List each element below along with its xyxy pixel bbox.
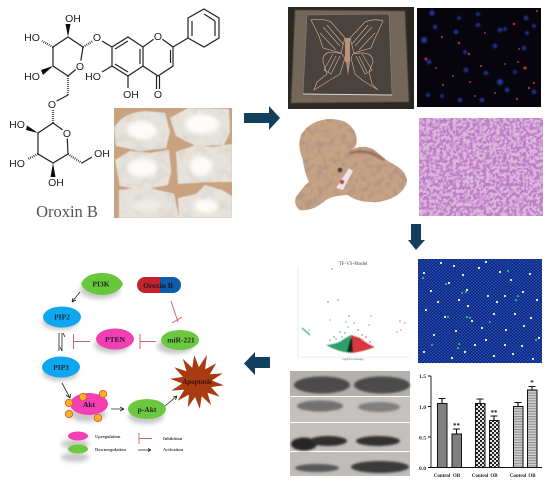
- legend: Activation: [163, 447, 183, 452]
- axis labels: OB: [490, 474, 498, 479]
- volcano plot title: TF-VS-Model: [339, 262, 368, 267]
- significance marks: [453, 379, 534, 430]
- node shadows: [42, 281, 193, 462]
- pathway diagram: [42, 273, 224, 462]
- node: Apoptosis burst: [170, 355, 224, 409]
- error bars: [438, 386, 536, 434]
- legend: Upregulation: [95, 434, 121, 439]
- gene microarray: [418, 259, 542, 363]
- legend: [68, 432, 183, 454]
- structure atom labels: O: [93, 32, 101, 44]
- node: PI3K: PI3K: [92, 280, 110, 288]
- axis labels: 0.5: [419, 436, 426, 442]
- chemical structure: Oroxin B: [9, 9, 219, 189]
- arrow: left: [244, 352, 270, 375]
- node: PTEN: [96, 328, 134, 350]
- structure atom labels: O: [154, 31, 162, 43]
- significance marks: **: [490, 409, 498, 417]
- axis labels: OB: [528, 474, 536, 479]
- western blot: [290, 371, 410, 476]
- compound name: Oroxin B: [36, 202, 98, 221]
- structure atom labels: HO: [9, 158, 25, 170]
- node: Akt: Akt: [83, 400, 96, 409]
- arrow: down: [408, 224, 425, 250]
- axes: [428, 376, 542, 468]
- structure atom labels: HO: [9, 119, 25, 131]
- volcano plot: [298, 262, 410, 361]
- node: PIP2: PIP2: [54, 312, 70, 322]
- structure atom labels: OH: [94, 148, 110, 160]
- bars: [438, 390, 537, 468]
- structure atom labels: O: [76, 61, 84, 73]
- axis labels: Control: [472, 474, 489, 479]
- axis labels: [419, 374, 536, 479]
- butterfly channels: [311, 19, 383, 90]
- axis labels: Control: [434, 474, 451, 479]
- structure atom labels: O: [63, 128, 71, 140]
- axis labels: Control: [510, 474, 527, 479]
- node: PIP2: [43, 306, 81, 328]
- node: PIP3: [42, 356, 80, 378]
- stereo wedges: [26, 24, 70, 177]
- photo: oroxin B powder samples: [114, 108, 232, 218]
- axis labels: 0.0: [419, 466, 426, 472]
- structure atom labels: HO: [24, 71, 40, 83]
- inhibition arrows: [74, 301, 182, 349]
- node: p-Akt: p-Akt: [138, 405, 157, 414]
- photo: fluorescence microscopy: [417, 8, 541, 107]
- structure atom labels: O: [48, 99, 56, 111]
- axis labels: OB: [453, 474, 461, 479]
- node: Oroxin B capsule: Oroxin B: [143, 281, 173, 290]
- structure atom labels: O: [154, 89, 162, 101]
- photo: H&E histology section: [419, 118, 543, 216]
- structure atom labels: OH: [123, 89, 139, 101]
- node: miR-221: [161, 330, 199, 350]
- node: PI3K: [81, 273, 123, 295]
- structure atom labels: OH: [48, 177, 64, 189]
- node: PIP3: PIP3: [53, 363, 69, 372]
- photo: liver tissue: [295, 119, 407, 210]
- legend: Downregulation: [95, 447, 126, 452]
- node: miR-221: miR-221: [167, 336, 195, 344]
- pathway arrows: [59, 292, 177, 411]
- node: PTEN: PTEN: [105, 335, 126, 344]
- structure atom labels: HO: [24, 32, 40, 44]
- significance marks: **: [453, 422, 460, 430]
- node: Akt: [65, 390, 108, 422]
- structure atom labels: HO: [85, 71, 101, 83]
- structure atom labels: OH: [65, 13, 81, 25]
- axis labels: 1.0: [419, 405, 426, 411]
- volcano plot axis labels: log2(fold change): [342, 357, 364, 361]
- node: p-Akt: [128, 399, 166, 419]
- structure atom labels: [9, 13, 162, 189]
- arrow: right: [244, 106, 280, 130]
- axis labels: 1.5: [419, 374, 426, 380]
- node: Apoptosis burst: Apoptosis: [182, 378, 212, 386]
- legend: Inhibition: [163, 436, 183, 441]
- bar chart: [419, 374, 542, 479]
- photo: butterfly microfluidic chip: [288, 7, 414, 109]
- node: Oroxin B capsule: [137, 277, 181, 293]
- significance marks: *: [530, 379, 534, 387]
- ring oxygen backgrounds: [46, 30, 164, 138]
